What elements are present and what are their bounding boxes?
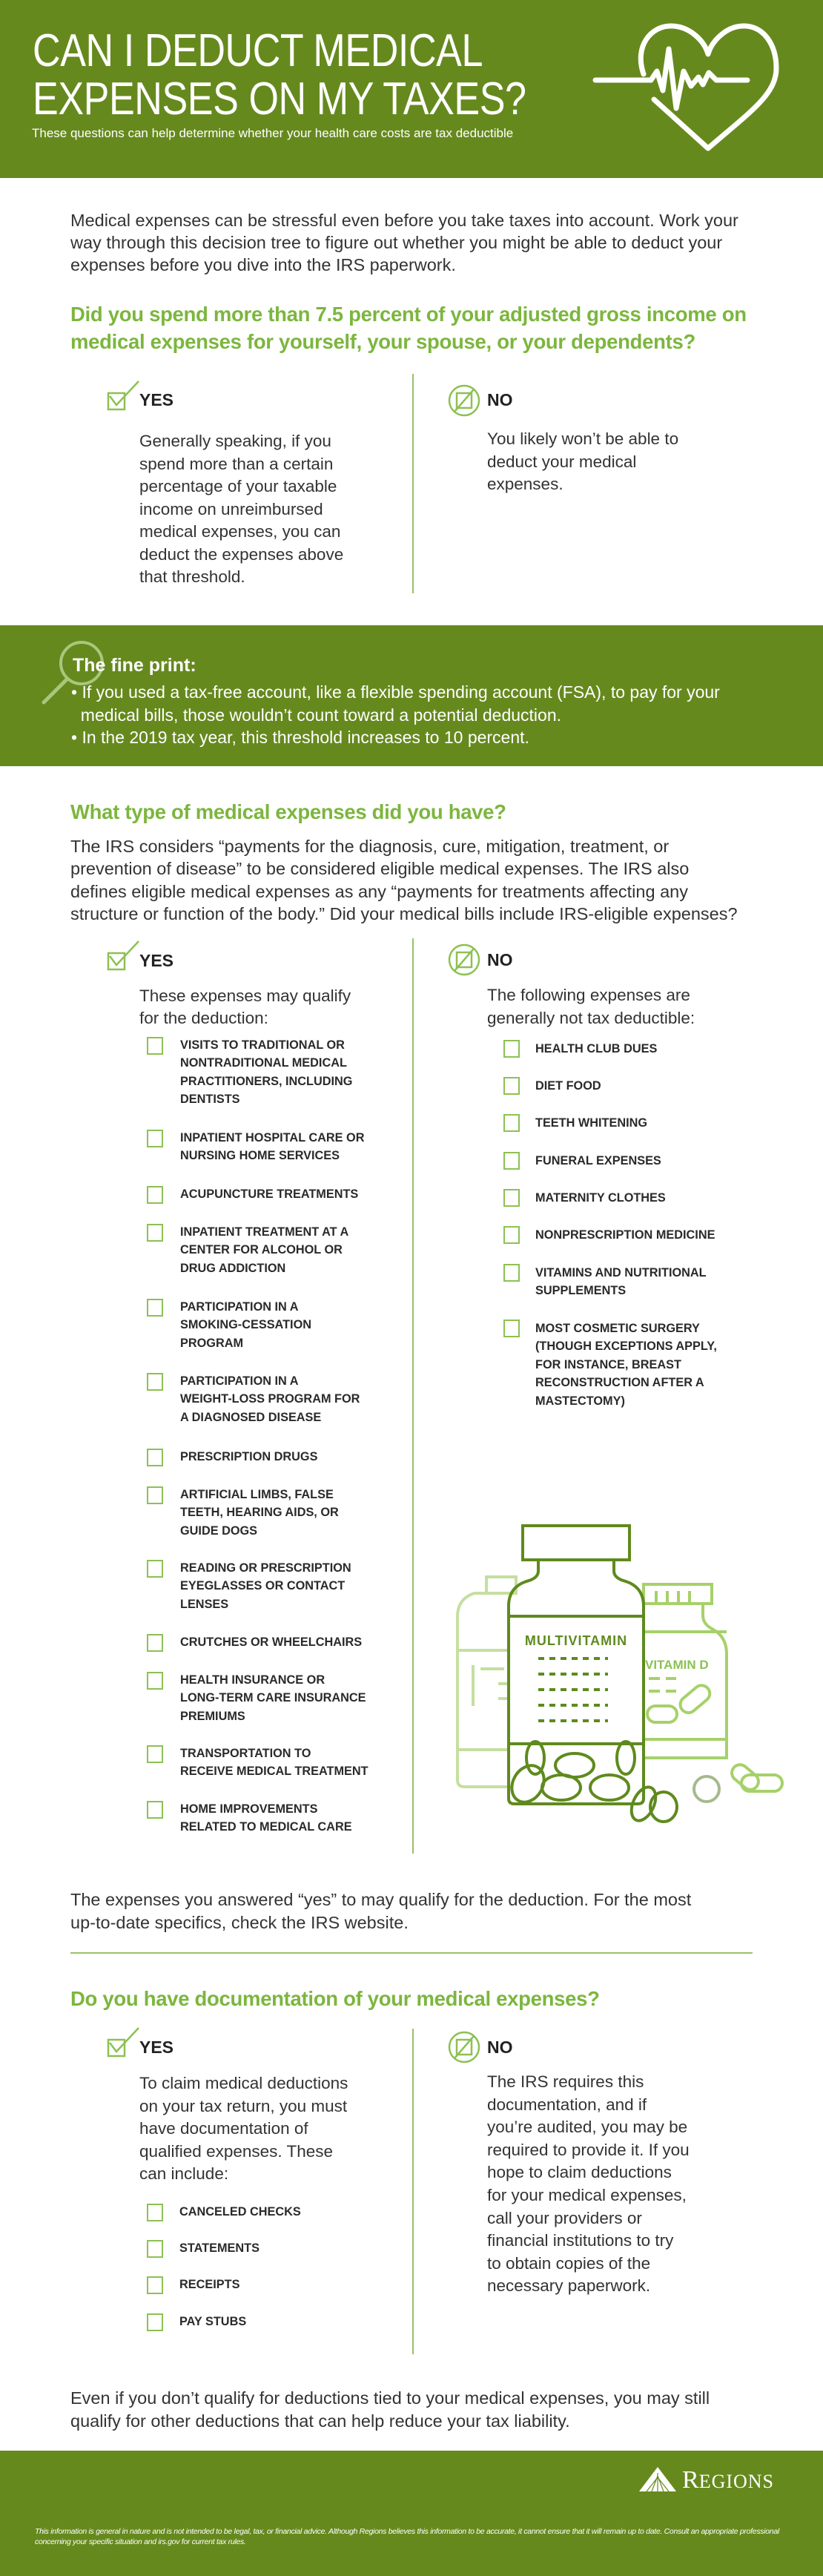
panel: q2 no list: MATERNITY CLOTHES [535,1191,666,1205]
horizontal rule [70,1952,753,1954]
yes label: YES [139,951,173,970]
left light bottle [457,1577,516,1787]
panel: q1 no [448,384,678,493]
no text: for your medical expenses, [487,2186,687,2204]
closing text q2 [70,1890,691,1932]
question 2 paragraph [70,837,738,923]
yes items: READING OR PRESCRIPTION [180,1561,351,1575]
yes items: TEETH, HEARING AIDS, OR [180,1506,339,1519]
subtitle: These questions can help determine whether your health care costs are tax deductible [32,126,513,140]
panel: q2 no list: HEALTH CLUB DUES [535,1042,657,1055]
yes text [139,2074,348,2183]
yes items: PREMIUMS [180,1710,245,1723]
yes items: PARTICIPATION IN A [180,1374,298,1388]
panel: q2 no list: FOR INSTANCE, BREAST [535,1358,681,1371]
no intro: generally not tax deductible: [487,1009,695,1027]
panel: q3 yes: RECEIPTS [179,2278,239,2291]
yes items: INPATIENT HOSPITAL CARE OR [180,1131,364,1144]
illustration: vitamin bottles [456,1524,784,1823]
closing text: qualify for other deductions that can help reduce your tax liability. [70,2411,570,2430]
yes items: PROGRAM [180,1337,243,1350]
logo: regions: REGIONS [682,2466,774,2494]
no label: NO [487,390,513,409]
icon: check box [107,2027,139,2058]
panel: q2 no list: MOST COSMETIC SURGERY [535,1322,700,1335]
yes items: ARTIFICIAL LIMBS, FALSE [180,1488,334,1501]
no text: hope to claim deductions [487,2163,672,2181]
panel: q2 no list: MASTECTOMY) [535,1394,625,1408]
fine print heading: The fine print: [73,655,196,676]
yes items: SMOKING-CESSATION [180,1318,311,1331]
icon: no circle [448,943,480,976]
panel: q2 no list: TEETH WHITENING [535,1116,647,1130]
question 1 heading: Did you spend more than 7.5 percent of your adjusted gross income on [70,303,747,326]
panel: q2 no list: VITAMINS AND NUTRITIONAL [535,1266,707,1279]
illustration: vitamin bottles: VITAMIN D [645,1658,709,1672]
title: EXPENSES ON MY TAXES? [33,73,526,125]
intro paragraph: Medical expenses can be stressful even before you take taxes into account. Work your [70,211,738,230]
fine print bullets: medical bills, those wouldn’t count toward a potential deduction. [81,705,561,724]
yes items: LONG-TERM CARE INSURANCE [180,1691,366,1704]
question 1 heading [70,303,747,353]
yes items: CENTER FOR ALCOHOL OR [180,1243,343,1256]
question 2 paragraph: The IRS considers “payments for the diagnosis, cure, mitigation, treatment, or [70,837,669,856]
yes items: EYEGLASSES OR CONTACT [180,1579,345,1592]
divider q3 [412,2029,414,2354]
yes items: INPATIENT TREATMENT AT A [180,1225,348,1239]
yes text: qualified expenses. These [139,2142,333,2160]
yes items: DRUG ADDICTION [180,1262,285,1275]
panel: q2 no list: RECONSTRUCTION AFTER A [535,1376,704,1389]
yes items: TRANSPORTATION TO [180,1747,311,1760]
panel: q2 no list: FUNERAL EXPENSES [535,1154,661,1167]
yes text: deduct the expenses above [139,544,343,564]
yes text: medical expenses, you can [139,522,340,541]
no text: expenses. [487,475,563,493]
no intro [487,986,695,1027]
yes items: NURSING HOME SERVICES [180,1149,340,1162]
panel: q3 yes [107,2027,348,2331]
yes intro [139,986,351,1027]
yes items: PRACTITIONERS, INCLUDING [180,1075,352,1088]
no text [487,429,678,493]
no intro: The following expenses are [487,986,690,1004]
question 2 heading: What type of medical expenses did you have? [70,800,506,823]
question 2 paragraph: defines eligible medical expenses as any “payments for treatments affecting any [70,882,688,901]
yes items: GUIDE DOGS [180,1524,257,1538]
yes items: PARTICIPATION IN A [180,1300,298,1314]
icon: check box [107,381,139,411]
yes items: CRUTCHES OR WHEELCHAIRS [180,1635,362,1649]
question 1 heading: medical expenses for yourself, your spouse, or your dependents? [70,330,695,353]
yes items: WEIGHT-LOSS PROGRAM FOR [180,1392,360,1406]
no text: documentation, and if [487,2095,647,2114]
yes items: ACUPUNCTURE TREATMENTS [180,1187,358,1201]
panel: q2 yes list [107,941,351,1027]
yes items: LENSES [180,1598,228,1611]
yes items: RELATED TO MEDICAL CARE [180,1820,352,1834]
yes text: spend more than a certain [139,454,333,473]
no text: call your providers or [487,2209,642,2227]
panel: q2 no list [448,943,717,1408]
yes items: HOME IMPROVEMENTS [180,1802,317,1816]
panel: q2 no list: SUPPLEMENTS [535,1284,626,1297]
panel: q3 no [448,2031,690,2295]
divider q2 [412,938,414,1854]
closing text q2: The expenses you answered “yes” to may qualify for the deduction. For the most [70,1890,691,1909]
title [33,25,526,125]
fine print bullets: • If you used a tax-free account, like a flexible spending account (FSA), to pay for your [71,682,720,702]
yes items: A DIAGNOSED DISEASE [180,1411,321,1424]
no text: The IRS requires this [487,2072,644,2091]
divider q1 [412,374,414,593]
yes label: YES [139,2038,173,2057]
yes text: on your tax return, you must [139,2096,347,2115]
yes items: HEALTH INSURANCE OR [180,1673,325,1687]
closing text: Even if you don’t qualify for deductions tied to your medical expenses, you may still [70,2388,710,2408]
no text: You likely won’t be able to [487,429,678,448]
main multivitamin bottle [506,1526,677,1825]
yes text: income on unreimbursed [139,500,323,518]
no text: financial institutions to try [487,2231,673,2250]
yes intro: for the deduction: [139,1009,268,1027]
footer band [0,2451,823,2576]
title: CAN I DEDUCT MEDICAL [33,25,483,76]
yes intro: These expenses may qualify [139,986,351,1005]
fine print bullets: • In the 2019 tax year, this threshold increases to 10 percent. [71,728,529,747]
intro paragraph [70,211,738,274]
no label: NO [487,2038,513,2057]
icon: check box [107,941,139,970]
yes items: RECEIVE MEDICAL TREATMENT [180,1765,368,1778]
logo: regions [639,2466,774,2494]
yes items: DENTISTS [180,1093,240,1106]
panel: q1 yes [107,381,343,586]
header band [0,0,823,178]
icon: no circle [448,384,480,417]
icon: no circle [448,2031,480,2063]
no text: required to provide it. If you [487,2141,690,2159]
panel: q3 yes: CANCELED CHECKS [179,2205,301,2218]
fine print bullets [71,682,720,747]
intro paragraph: expenses before you dive into the IRS paperwork. [70,255,456,274]
question 2 paragraph: prevention of disease” to be considered eligible medical expenses. The IRS also [70,859,689,878]
panel: q3 yes: PAY STUBS [179,2315,246,2328]
right bottle vitamin d [644,1584,782,1793]
no text: to obtain copies of the [487,2254,650,2273]
closing text q2: up-to-date specifics, check the IRS website. [70,1913,409,1932]
panel: q2 no list: (THOUGH EXCEPTIONS APPLY, [535,1340,717,1353]
yes items: NONTRADITIONAL MEDICAL [180,1056,347,1070]
question 2 paragraph: structure or function of the body.” Did your medical bills include IRS-eligible expenses? [70,904,738,923]
panel: q2 no list: NONPRESCRIPTION MEDICINE [535,1228,715,1242]
no text [487,2072,690,2295]
no label: NO [487,950,513,969]
panel: q2 no list: DIET FOOD [535,1079,601,1093]
disclaimer: This information is general in nature and is not intended to be legal, tax, or financial advice. Although Regions believes this information to be accurate, it cannot ensure that it will remain up to date. Consult an appropriate professional [35,2527,779,2536]
no text: you’re audited, you may be [487,2118,687,2136]
disclaimer [35,2527,780,2546]
yes text [139,432,343,586]
yes text: can include: [139,2164,228,2183]
icon: magnifier [42,641,104,705]
yes items: PRESCRIPTION DRUGS [180,1450,317,1463]
yes items: VISITS TO TRADITIONAL OR [180,1038,345,1052]
disclaimer: concerning your specific situation and irs.gov for current tax rules. [35,2537,246,2546]
yes label: YES [139,390,173,409]
question 3 heading: Do you have documentation of your medical expenses? [70,1987,600,2010]
illustration: vitamin bottles: MULTIVITAMIN [525,1633,627,1648]
no text: deduct your medical [487,452,636,470]
yes text: To claim medical deductions [139,2074,348,2092]
yes items [147,1037,368,1834]
icon: heart with heartbeat [593,24,779,151]
yes text: have documentation of [139,2119,308,2138]
no text: necessary paperwork. [487,2276,650,2295]
panel: fine print [0,625,823,766]
yes text: percentage of your taxable [139,477,337,495]
yes text: that threshold. [139,567,245,586]
intro paragraph: way through this decision tree to figure out whether you might be able to deduct your [70,233,722,252]
closing text [70,2388,710,2431]
panel: q3 yes: STATEMENTS [179,2241,260,2255]
yes text: Generally speaking, if you [139,432,331,450]
